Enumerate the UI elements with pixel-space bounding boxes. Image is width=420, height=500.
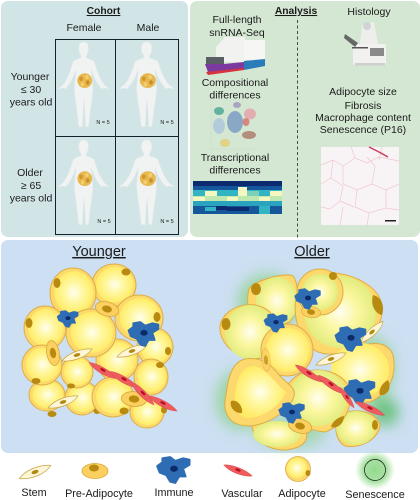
figure: older female: [59, 140, 108, 225]
panel: analysis: [190, 1, 420, 238]
legend item: stem: Stem: [21, 487, 47, 499]
bottom right adipocyte: [336, 411, 380, 447]
column label: Male: Male: [137, 22, 160, 34]
text: snRNA-Seq: snRNA-Seq: [209, 27, 265, 39]
row label: Older: Older: [17, 167, 43, 179]
legend item: senescence: [345, 450, 405, 500]
heading: Cohort: Cohort: [87, 6, 121, 17]
panel: tissue comparison: [1, 240, 418, 453]
N label: N = 5: [97, 219, 111, 225]
legend item: vascular: [221, 465, 263, 500]
text: transcriptional differences: Transcriptional: [201, 152, 269, 164]
pre-adipocytes: [45, 299, 147, 407]
icon: microscope: [344, 22, 386, 66]
icon: sequencer: [205, 37, 265, 75]
immune cells: [264, 289, 374, 423]
heading: Older: Older: [294, 244, 330, 260]
legend item: pre-adipocyte: [65, 464, 133, 500]
row label: Younger: ≤ 30: [21, 84, 41, 96]
stem cells: [48, 345, 147, 408]
legend item: immune: Immune: [154, 487, 194, 499]
legend item: adipocyte: Adipocyte: [278, 488, 326, 500]
legend item: pre-adipocyte: Pre-Adipocyte: [65, 488, 133, 500]
stem cells: [316, 321, 387, 365]
text: compositional differences: differences: [209, 90, 261, 102]
text: histology measures: Adipocyte size: [329, 86, 397, 98]
row label: Older: ≥ 65: [21, 180, 41, 192]
text: Histology: Histology: [347, 6, 391, 18]
vascular cells: [293, 365, 385, 415]
text: histology measures: Macrophage content: [315, 112, 411, 124]
row label: Younger: years old: [10, 96, 52, 108]
lower middle adipocyte: [282, 370, 350, 432]
legend item: immune: [154, 457, 194, 499]
right adipocyte: [335, 343, 394, 402]
text: histology measures: Fibrosis: [345, 100, 381, 112]
heading: Analysis: Analysis: [275, 6, 317, 17]
immune cells: [57, 311, 158, 346]
text: transcriptional differences: differences: [209, 164, 261, 176]
pre-adipocytes: [261, 305, 321, 436]
cohort grid: [56, 40, 178, 234]
legend: [19, 450, 405, 500]
column label: Female: Female: [66, 22, 102, 34]
row label: Younger: Younger: [11, 71, 50, 83]
heading: Younger: Younger: [72, 244, 126, 260]
middle adipocyte: [261, 324, 313, 376]
top left adipocyte: [248, 275, 297, 330]
illustration: older tissue: [216, 269, 399, 450]
figure: older male: [120, 140, 173, 225]
legend item: adipocyte: [278, 456, 326, 500]
senescence glow: [216, 274, 399, 448]
top small adipocyte: [297, 269, 343, 315]
chart: heatmap: [193, 181, 282, 214]
N label: N = 5: [160, 219, 174, 225]
lower left adipocyte: [225, 358, 294, 426]
bottom adipocyte: [252, 420, 307, 450]
divider: [296, 20, 298, 238]
row label: Older: years old: [10, 192, 52, 204]
text: histology measures: Senescence (P16): [320, 124, 406, 136]
legend item: vascular: Vascular: [221, 488, 263, 500]
figure: younger female: [59, 42, 108, 127]
legend item: stem: [19, 465, 51, 499]
N label: N = 5: [96, 120, 110, 126]
N label: N = 5: [160, 120, 174, 126]
image: histology section: [321, 147, 399, 225]
text: compositional differences: Compositional: [202, 77, 268, 89]
illustration: younger tissue: [22, 264, 179, 428]
figure: younger male: [120, 42, 173, 127]
panel: cohort: [1, 1, 188, 237]
chart: tSNE clusters: [211, 102, 258, 149]
vascular cells: [87, 362, 179, 411]
text: snRNA-Seq: Full-length: [212, 14, 262, 26]
left adipocyte: [220, 305, 274, 359]
large top adipocyte: [295, 273, 382, 354]
